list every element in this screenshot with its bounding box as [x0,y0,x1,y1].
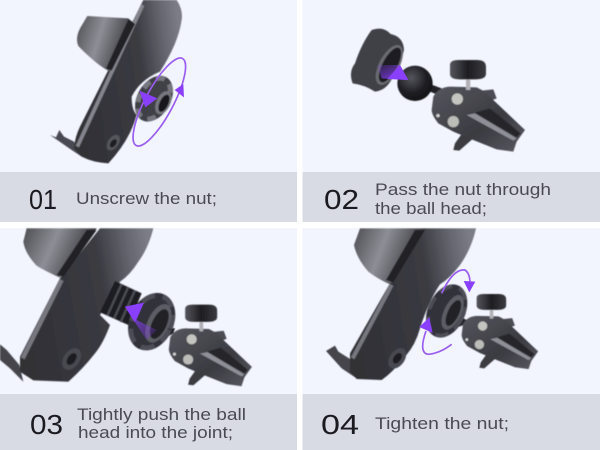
icon: phone holder with nut [50,0,182,163]
step text 01: Unscrew the nut; [76,190,217,208]
step bar 04 [302,394,600,450]
icon: nut, ball head and clamp [351,29,525,152]
panel: step 01 [0,0,297,172]
step text 03: Tightly push the ball [77,406,246,424]
step number 01: 01 [29,184,57,215]
arrow: push direction [377,65,408,80]
icon: assembled holder and clamp [326,228,538,380]
step bar 02 [302,172,600,222]
panel: step 03 [0,228,297,394]
step bar 03 [0,394,297,450]
step number 04: 04 [321,409,359,440]
step text 04: Tighten the nut; [375,415,509,433]
panel: step 04 [302,228,600,394]
step number 02: 02 [324,184,359,215]
icon: rotation arrows [124,52,195,152]
step text 02: Pass the nut through [375,181,551,199]
step text 02: the ball head; [375,200,487,218]
panel: step 02 [302,0,600,172]
arrow: push into joint [125,303,157,340]
step text 03: head into the joint; [78,424,233,442]
step bar 01 [0,172,297,222]
step number 03: 03 [30,409,63,440]
icon: holder, thread, nut and clamp [0,228,252,386]
icon: tightening arrows [419,270,475,354]
